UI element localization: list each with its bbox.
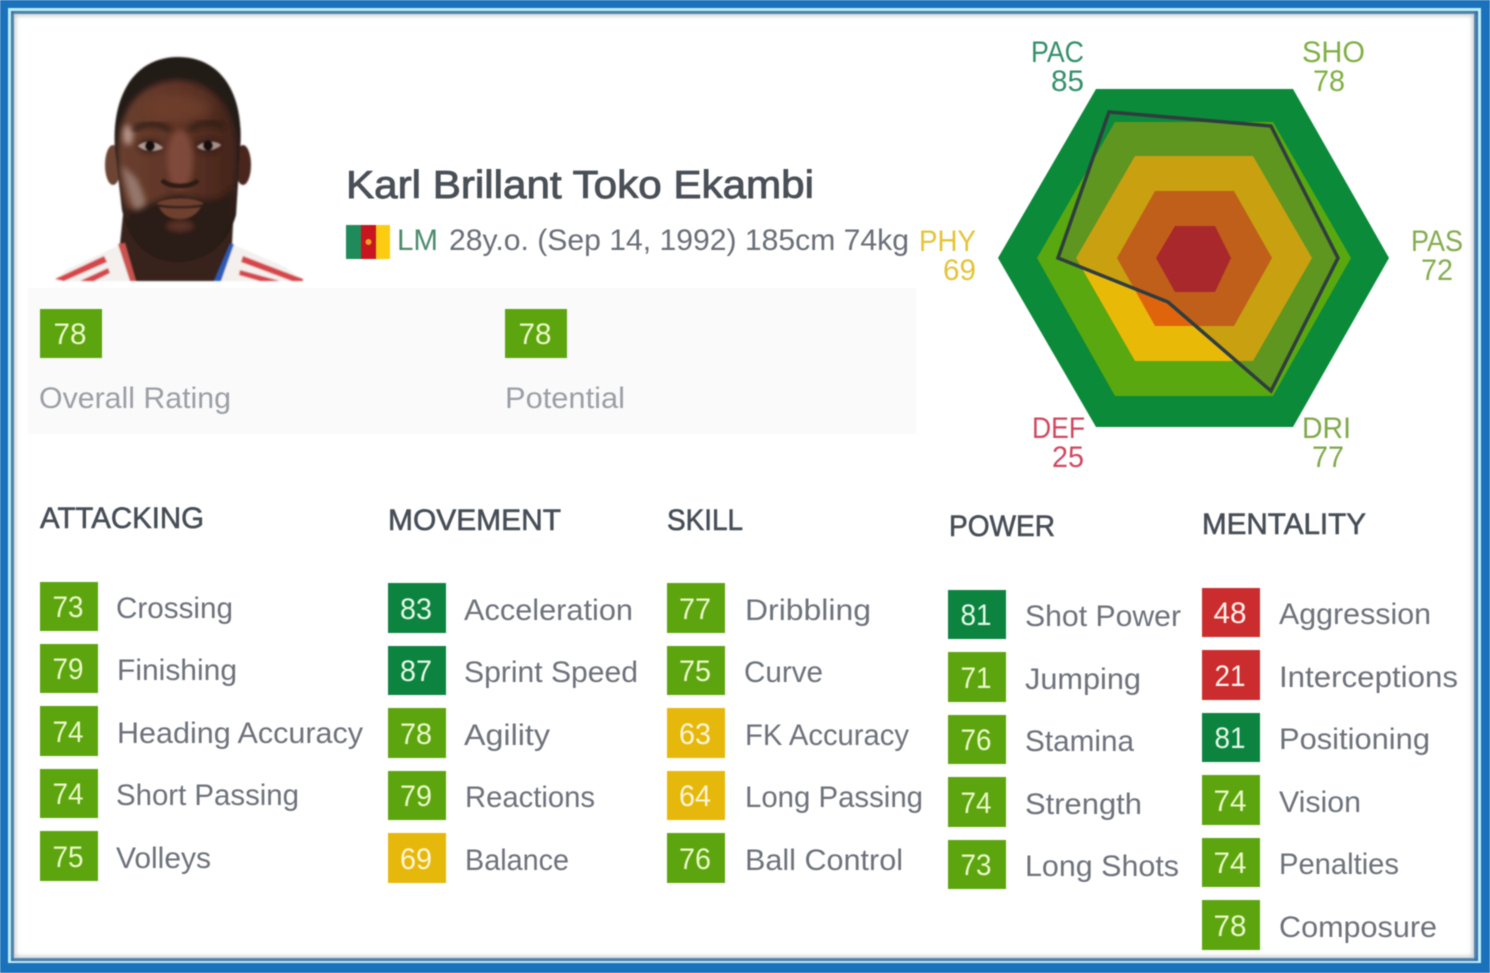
stat: positioning: 81 [1214, 722, 1246, 755]
stat: jumping [948, 652, 1141, 702]
stat: shot power [948, 590, 1181, 639]
stat: heading accuracy: Heading Accuracy [117, 717, 363, 750]
stat: penalties: Penalties [1279, 848, 1399, 881]
stat: dribbling: Dribbling [745, 594, 871, 627]
stat: positioning: Positioning [1279, 723, 1430, 756]
potential: Potential [505, 382, 625, 415]
heading: attacking: ATTACKING [40, 502, 204, 535]
player position: LM [397, 224, 438, 257]
radar label: DRI [1302, 412, 1351, 474]
stat: agility: 78 [400, 718, 432, 751]
overall rating: Overall Rating [39, 382, 231, 415]
panel: mentality [1202, 508, 1458, 950]
cheek highlights [123, 125, 133, 145]
stat: positioning [1202, 713, 1430, 762]
radar chart [998, 89, 1389, 427]
stat: composure: Composure [1279, 911, 1437, 944]
stat: long passing: 64 [679, 780, 711, 813]
nose [162, 180, 198, 186]
stat: vision: 74 [1214, 785, 1246, 818]
heading: power: POWER [949, 510, 1055, 543]
stat: balance [388, 833, 569, 883]
stat: heading accuracy [40, 706, 363, 756]
stat: finishing [40, 644, 237, 693]
jersey [55, 244, 304, 281]
stat: strength: Strength [1025, 788, 1142, 821]
stat: stamina: 76 [960, 724, 992, 757]
stat: jumping: Jumping [1025, 663, 1141, 696]
stat: sprint speed: 87 [400, 655, 432, 688]
stat: strength: 74 [960, 787, 992, 820]
stat: vision: Vision [1279, 786, 1361, 819]
panel: rating background [28, 288, 916, 434]
icon: Cameroon flag [346, 225, 390, 259]
heading: skill: SKILL [667, 504, 743, 537]
stat: penalties: 74 [1214, 847, 1246, 880]
stat: crossing [40, 582, 233, 631]
radar label: DRI: DRI [1302, 412, 1351, 445]
stat: jumping: 71 [960, 662, 992, 695]
radar label: DRI: 77 [1312, 441, 1344, 474]
stat: volleys [40, 831, 211, 881]
stat: sprint speed [388, 646, 638, 695]
stat: acceleration: 83 [400, 593, 432, 626]
stat: composure: 78 [1214, 910, 1246, 943]
face [118, 80, 237, 220]
radar label: SHO [1302, 36, 1365, 98]
radar label: PAS: PAS [1411, 225, 1463, 258]
radar label: PHY [919, 225, 976, 287]
stat: reactions: Reactions [465, 781, 595, 814]
heading: mentality: MENTALITY [1202, 508, 1366, 541]
panel: movement [388, 504, 638, 883]
overall rating [39, 309, 231, 415]
head base [115, 57, 241, 262]
player portrait [55, 57, 304, 281]
radar label: PAC: 85 [1051, 65, 1084, 98]
stat: volleys: Volleys [116, 842, 211, 875]
stat: long shots: 73 [960, 849, 992, 882]
stat: short passing: 74 [52, 778, 84, 811]
stat: aggression: Aggression [1279, 598, 1431, 631]
stat: balance: Balance [465, 844, 569, 877]
stat: stamina [948, 715, 1134, 764]
stat: shot power: Shot Power [1025, 600, 1181, 633]
radar label: PAC: PAC [1031, 36, 1084, 69]
stat: long shots: Long Shots [1025, 850, 1179, 883]
panel: attacking [40, 502, 363, 881]
stat: shot power: 81 [960, 599, 992, 632]
stat: finishing: 79 [52, 653, 84, 686]
potential: 78 [518, 318, 552, 351]
stat: stamina: Stamina [1025, 725, 1134, 758]
stat: composure [1202, 900, 1437, 950]
stat: interceptions: 21 [1214, 660, 1246, 693]
stat: acceleration: Acceleration [464, 594, 633, 627]
stat: balance: 69 [400, 843, 432, 876]
radar label: DEF: 25 [1052, 441, 1084, 474]
stat: long shots [948, 840, 1179, 889]
stat: fk accuracy: 63 [679, 718, 711, 751]
stat: short passing [40, 769, 299, 818]
radar label: PAS [1411, 225, 1463, 287]
radar label: PHY: PHY [919, 225, 976, 258]
stat: interceptions [1202, 650, 1458, 700]
stat: crossing: Crossing [116, 592, 233, 625]
stat: short passing: Short Passing [116, 779, 299, 812]
stat: penalties [1202, 838, 1399, 887]
stat: crossing: 73 [52, 591, 84, 624]
beard [124, 188, 234, 224]
stat: agility: Agility [464, 719, 550, 752]
ears [105, 145, 121, 185]
player name: Karl Brillant Toko Ekambi [346, 164, 814, 207]
stat: strength [948, 777, 1142, 827]
forehead highlight [152, 94, 211, 122]
stat: dribbling [667, 583, 871, 633]
stat: acceleration [388, 583, 633, 633]
overall rating: 78 [54, 318, 86, 351]
stat: volleys: 75 [52, 841, 84, 874]
stat: aggression: 48 [1214, 597, 1246, 630]
stat: curve: 75 [679, 655, 711, 688]
potential [505, 309, 625, 415]
stat: dribbling: 77 [679, 593, 711, 626]
stat: heading accuracy: 74 [52, 716, 84, 749]
radar label: PAC [1031, 36, 1084, 98]
stat: reactions [388, 771, 595, 820]
stat: long passing: Long Passing [745, 781, 923, 814]
radar label: DEF: DEF [1032, 412, 1085, 445]
panel: power [948, 510, 1181, 889]
radar label: SHO: SHO [1302, 36, 1365, 69]
radar label: SHO: 78 [1313, 65, 1345, 98]
lips and chin [157, 198, 203, 219]
stat: aggression [1202, 588, 1431, 637]
stat: curve: Curve [744, 656, 823, 689]
stat: ball control: Ball Control [745, 844, 903, 877]
heading: movement: MOVEMENT [388, 504, 561, 537]
stat: interceptions: Interceptions [1279, 661, 1458, 694]
panel: skill [667, 504, 923, 883]
eyes and brows [133, 124, 170, 130]
stat: fk accuracy: FK Accuracy [745, 719, 909, 752]
stat: long passing [667, 771, 923, 820]
radar label: PHY: 69 [943, 254, 976, 287]
stat: reactions: 79 [400, 780, 432, 813]
stat: vision [1202, 775, 1361, 825]
stat: curve [667, 646, 823, 695]
stat: sprint speed: Sprint Speed [464, 656, 638, 689]
stat: agility [388, 708, 550, 758]
neck [120, 205, 234, 281]
player details: 28y.o. (Sep 14, 1992) 185cm 74kg [449, 224, 909, 257]
stat: finishing: Finishing [117, 654, 237, 687]
stat: ball control: 76 [679, 843, 711, 876]
stat: ball control [667, 833, 903, 883]
radar label: PAS: 72 [1421, 254, 1453, 287]
radar label: DEF [1032, 412, 1085, 474]
stat: fk accuracy [667, 708, 909, 758]
